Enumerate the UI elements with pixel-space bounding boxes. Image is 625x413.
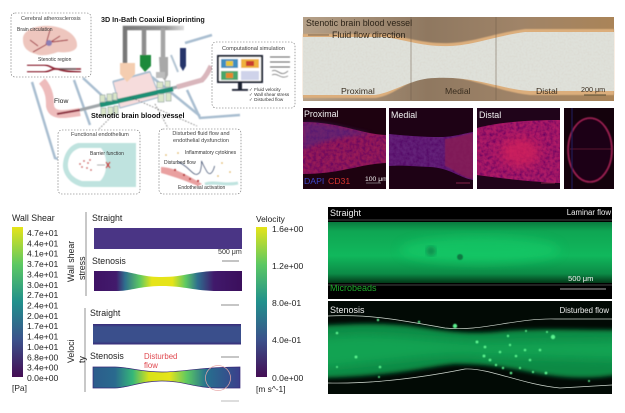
velocity group: Stenosis [90, 351, 124, 361]
colorbar: wall shear: 3.0e+01 [27, 280, 59, 290]
fluorescence panel: medial: Medial [391, 110, 417, 120]
brightfield photo: stenotic brain blood vessel: Proximal [341, 86, 375, 96]
velocity: straight vessel [93, 324, 241, 344]
label: Stenotic brain blood vessel: Stenotic brain blood vessel [91, 111, 184, 120]
panel: computational simulation: ✓ Disturbed flow [249, 97, 284, 102]
colorbar: wall shear: 3.4e+01 [27, 269, 59, 279]
colorbar: wall shear: 6.8e+00 [27, 352, 59, 362]
colorbar: velocity [256, 214, 304, 394]
microscopy panel: stenosis disturbed flow: Disturbed flow [560, 306, 609, 315]
wall shear stress group: Wall shear [66, 241, 76, 282]
icon: stenotic artery [27, 65, 81, 72]
colorbar: velocity: 8.0e-01 [272, 298, 301, 308]
microscopy panel: straight laminar flow: 500 μm [568, 274, 593, 283]
nozzle: peach [120, 63, 135, 82]
brightfield photo: stenotic brain blood vessel: 200 μm [581, 85, 605, 94]
schematic: 3D in-bath coaxial bioprinting [32, 28, 240, 159]
colorbar: velocity: 4.0e-01 [272, 335, 301, 345]
gantry arms [125, 28, 184, 63]
fluorescence panel: cross section [564, 108, 614, 189]
fluorescence panel: distal [477, 108, 560, 189]
brightfield photo: stenotic brain blood vessel: Medial [445, 86, 471, 96]
panel: disturbed fluid flow and endothelial dysfunction [159, 129, 241, 194]
colorbar: velocity: [m s^-1] [256, 384, 286, 394]
icon: lumen with hexagonal tissue [63, 143, 136, 187]
colorbar: wall shear: 1.0e+01 [27, 342, 59, 352]
colorbar: wall shear: 2.4e+01 [27, 300, 59, 310]
panel: functional endothelium: Barrier function [90, 151, 124, 157]
label: disturbed flow: flow [144, 361, 158, 370]
panel: computational simulation: ✓ Fluid velocity [249, 87, 281, 92]
panel: cerebral atherosclerosis: Stenotic region [38, 57, 72, 63]
label: disturbed flow: Disturbed [144, 352, 177, 361]
microscopy panel: straight laminar flow: Straight [330, 208, 362, 218]
velocity group [66, 308, 241, 401]
wall shear stress group: Stenosis [92, 256, 126, 266]
microscopy panel: stenosis disturbed flow [318, 301, 622, 394]
panel: functional endothelium [58, 130, 140, 194]
colorbar: wall shear: 1.7e+01 [27, 321, 59, 331]
colorbar: wall shear: 2.0e+01 [27, 311, 59, 321]
microscopy panel: straight laminar flow: Laminar flow [567, 208, 611, 217]
panel: cerebral atherosclerosis: Cerebral atherosclerosis [21, 16, 81, 22]
microscopy panel: straight laminar flow [328, 207, 612, 299]
wall shear stress group: Straight [92, 213, 123, 223]
connector lines [98, 97, 197, 130]
printed vessel [80, 87, 177, 110]
panel: cerebral atherosclerosis [11, 13, 91, 77]
panel: computational simulation: ✓ Wall shear stress [249, 92, 290, 97]
panel: functional endothelium: Functional endothelium [71, 132, 129, 138]
panel: cerebral atherosclerosis: Brain circulation [17, 27, 53, 33]
colorbar: wall shear: 3.7e+01 [27, 259, 59, 269]
platform frame [32, 35, 240, 159]
icon: monitor [217, 55, 290, 91]
colorbar: wall shear: 1.4e+01 [27, 332, 59, 342]
pink inlet tube [42, 81, 80, 114]
colorbar: wall shear: 3.4e+00 [27, 363, 59, 373]
panel: computational simulation: Computational simulation [222, 46, 285, 52]
label: Flow: Flow [54, 98, 68, 105]
nozzle: green [140, 55, 151, 72]
panel: computational simulation [212, 42, 295, 108]
colorbar: velocity: 1.2e+00 [272, 261, 304, 271]
icon: brain [23, 26, 77, 55]
colorbar: wall shear: 4.1e+01 [27, 249, 59, 259]
velocity group: Straight [90, 308, 121, 318]
wall shear stress group [66, 212, 242, 305]
wall shear stress group: stress [77, 256, 87, 280]
colorbar: wall shear: 2.7e+01 [27, 290, 59, 300]
colorbar: velocity: 1.6e+00 [272, 224, 304, 234]
colorbar: wall shear: Wall Shear [12, 213, 55, 223]
brightfield photo: stenotic brain blood vessel: Distal [536, 86, 558, 96]
colorbar: wall shear [12, 213, 59, 393]
panel: disturbed fluid flow and endothelial dysfunction: Disturbed flow [164, 160, 196, 166]
fluorescence panel: proximal: Proximal [304, 109, 339, 119]
panel: disturbed fluid flow and endothelial dysfunction: Disturbed fluid flow and [172, 131, 230, 137]
fluorescence panel: distal: Distal [479, 110, 501, 120]
brightfield photo: stenotic brain blood vessel [303, 17, 614, 101]
colorbar: velocity: 0.0e+00 [272, 373, 304, 383]
velocity group: ty [77, 356, 87, 363]
panel: disturbed fluid flow and endothelial dysfunction: Endothelial activation [178, 185, 225, 191]
colorbar: velocity: Velocity [256, 214, 286, 224]
fluorescence panel: proximal: 100 μm [365, 176, 388, 183]
title: 3D In-Bath Coaxial Bioprinting: 3D In-Bath Coaxial Bioprinting [101, 15, 205, 24]
velocity group: Veloci [66, 339, 76, 363]
nozzle: grey [159, 57, 168, 81]
fluorescence panel: proximal: CD31 [328, 176, 350, 186]
wall shear: stenosis vessel [94, 271, 242, 291]
velocity: stenosis vessel [93, 367, 240, 388]
label: stenotic brain blood vessel: Stenotic brain blood vessel [306, 18, 412, 28]
colorbar: wall shear: 4.4e+01 [27, 238, 59, 248]
label: disturbed flow [144, 352, 177, 370]
wall shear: straight vessel [94, 228, 242, 249]
wall shear stress group: 500 μm [218, 248, 242, 256]
panel: disturbed fluid flow and endothelial dysfunction: endothelial dysfunction [173, 138, 229, 144]
panel: disturbed fluid flow and endothelial dysfunction: Inflammatory cytokines [185, 150, 237, 156]
colorbar: wall shear: 0.0e+00 [27, 373, 59, 383]
colorbar: wall shear: [Pa] [12, 383, 27, 393]
label: fluid flow direction: Fluid flow direction [332, 30, 406, 40]
colorbar: wall shear: 4.7e+01 [27, 228, 59, 238]
microscopy panel: stenosis disturbed flow: Stenosis [330, 305, 365, 315]
mesh supports [100, 81, 171, 116]
microscopy panel: straight laminar flow: Microbeads [330, 283, 377, 293]
fluorescence panel: proximal: DAPI [304, 176, 324, 186]
fluorescence panel: proximal [303, 108, 388, 189]
fluorescence panel: medial [389, 108, 473, 189]
pink outlet tube [177, 66, 211, 87]
icon: activated endothelium [161, 152, 238, 186]
bath [113, 72, 160, 108]
nozzle: navy [180, 48, 186, 71]
